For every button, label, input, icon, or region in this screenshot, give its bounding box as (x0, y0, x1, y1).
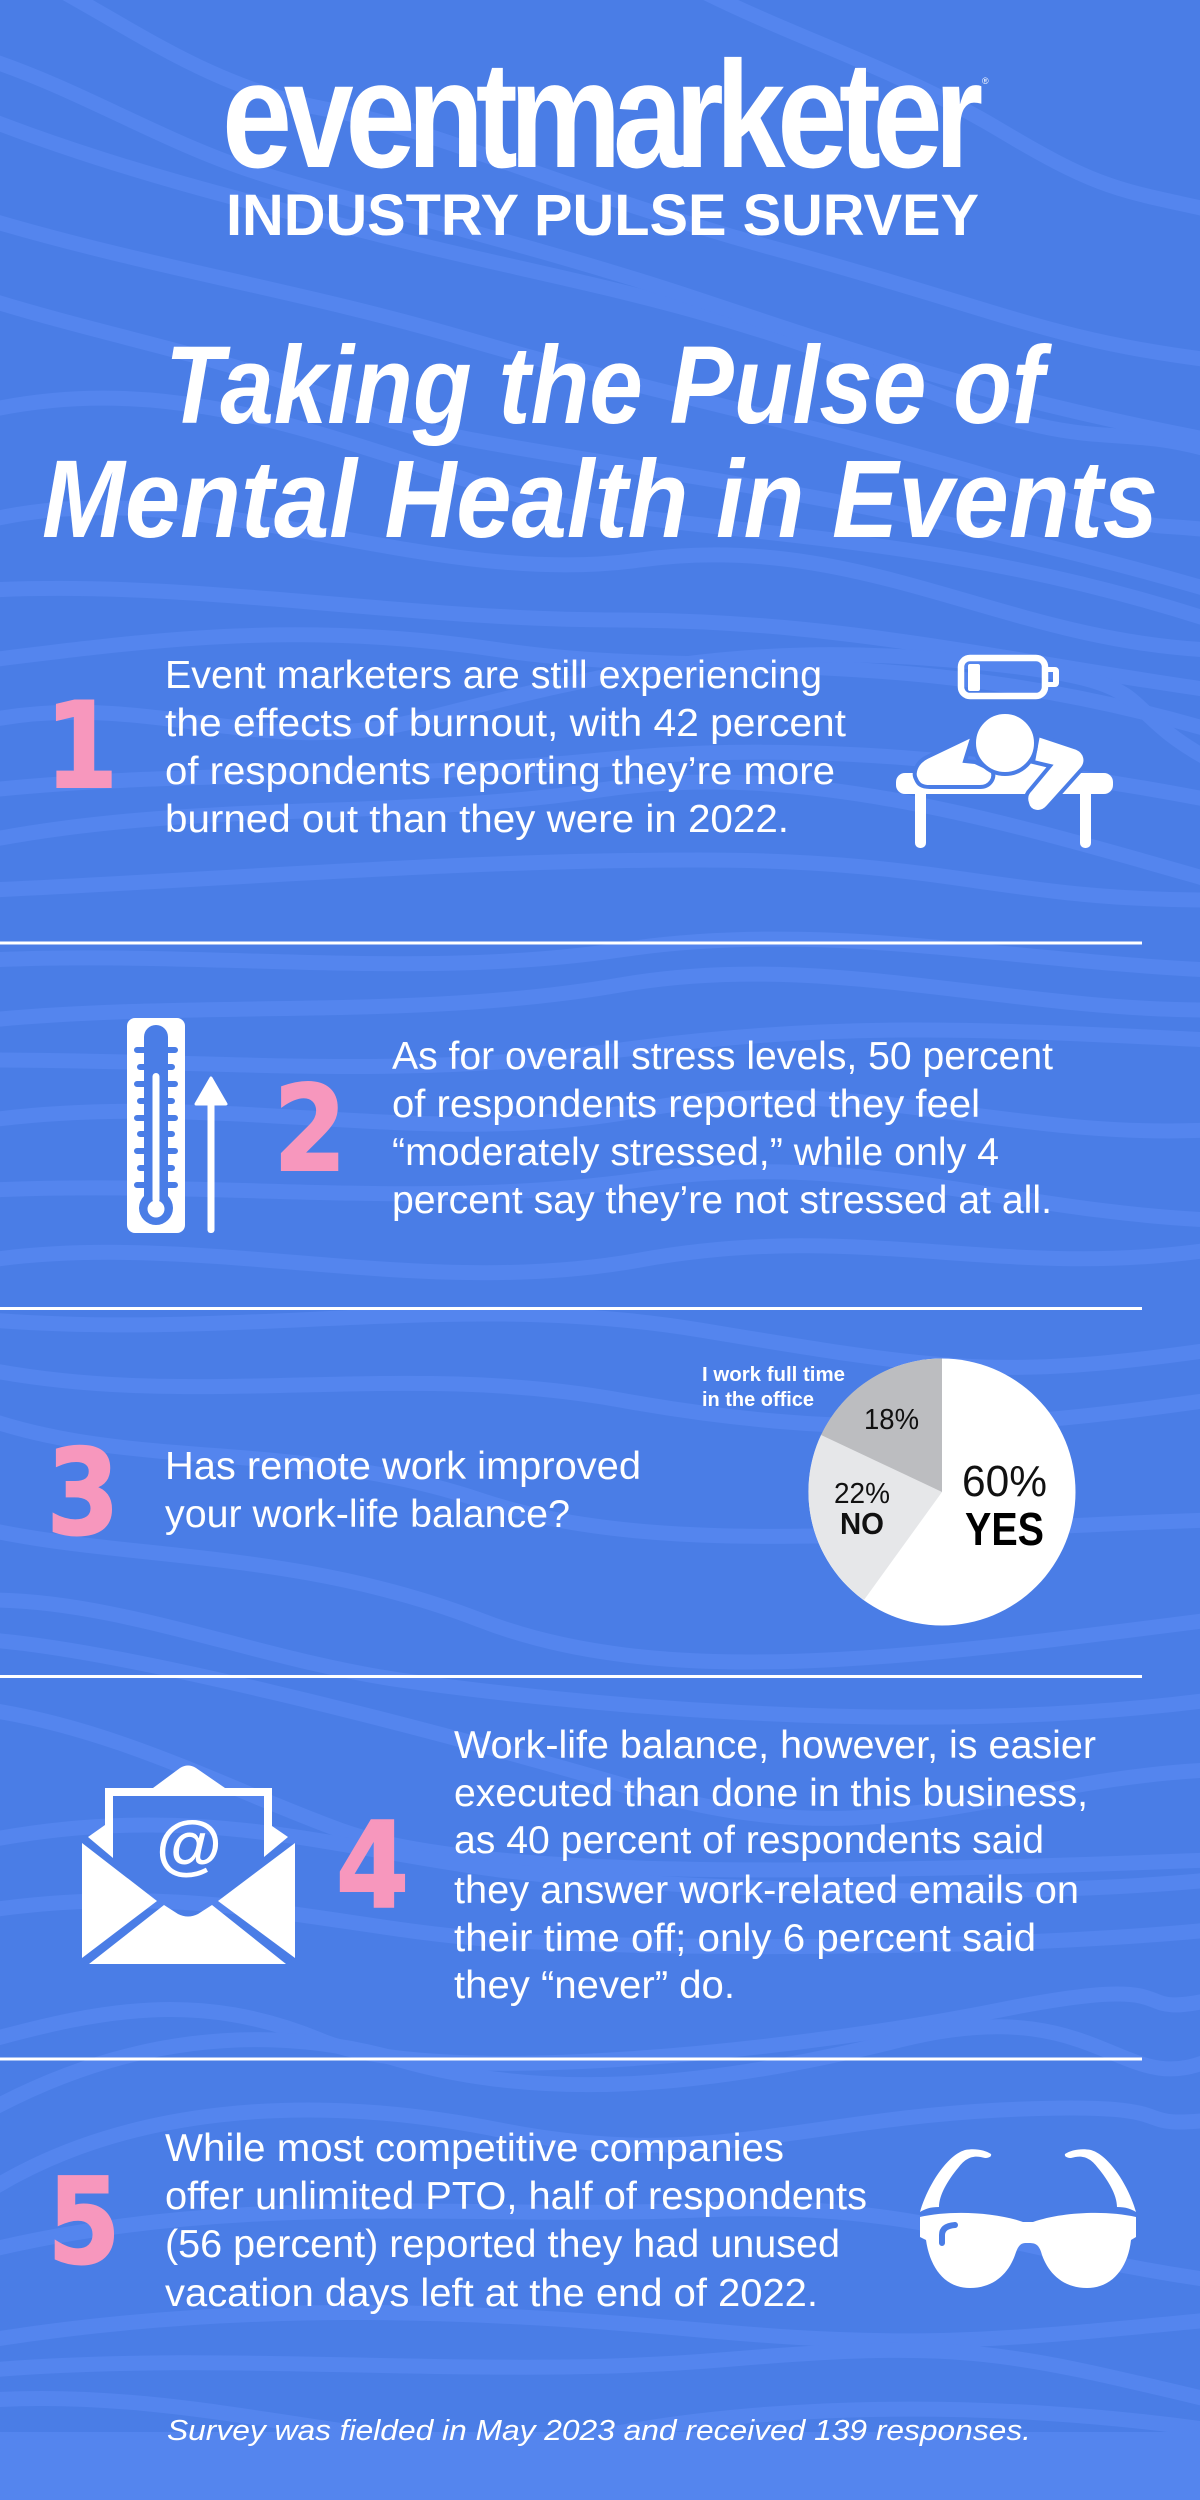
pie chart (702, 1358, 1076, 1626)
subtitle: industry pulse survey: INDUSTRY PULSE SURVEY (226, 183, 979, 248)
text: item 1 (165, 654, 846, 841)
icon: up arrow (196, 1078, 226, 1233)
number 2: 2 (274, 1061, 346, 1199)
panel: item 1 burnout (45, 654, 1113, 848)
pie chart: YES (965, 1503, 1044, 1555)
footer note: Survey was fielded in May 2023 and received 139 responses. (167, 2415, 1031, 2447)
panel: item 2 stress (127, 1018, 1053, 1233)
text: item 2: percent say they’re not stressed at all. (392, 1179, 1052, 1222)
text: item 1: Event marketers are still experiencing (165, 654, 822, 697)
text: item 5 (165, 2127, 867, 2315)
text: item 3: Has remote work improved (165, 1445, 641, 1488)
text: item 4: Work-life balance, however, is easier (454, 1724, 1096, 1767)
text: item 5: (56 percent) reported they had unused (165, 2223, 840, 2266)
text: item 5: vacation days left at the end of 2022. (165, 2272, 818, 2315)
number 4: 4 (336, 1798, 409, 1936)
number 3: 3 (46, 1425, 120, 1563)
text: item 4: as 40 percent of respondents said (454, 1819, 1044, 1862)
text: item 3 (165, 1445, 641, 1536)
text: item 4: executed than done in this business, (454, 1772, 1088, 1815)
panel: item 4 email (82, 1724, 1096, 2007)
panel: item 3 remote work (46, 1358, 1076, 1626)
text: item 1: the effects of burnout, with 42 percent (165, 702, 846, 745)
text: item 1: burned out than they were in 2022. (165, 798, 789, 841)
text: item 4: their time off; only 6 percent said (454, 1917, 1036, 1960)
title (42, 324, 1158, 561)
text: item 5: offer unlimited PTO, half of respondents (165, 2175, 867, 2218)
text: item 2: “moderately stressed,” while only 4 (392, 1131, 999, 1174)
pie chart: 22% (834, 1478, 890, 1510)
title: Taking the Pulse of (165, 324, 1052, 447)
text: item 2 (392, 1035, 1053, 1222)
divider 3 (0, 1675, 1142, 1678)
pie chart: 18% (864, 1404, 919, 1436)
icon: sunglasses (920, 2149, 1136, 2288)
text: item 4: they “never” do. (454, 1964, 735, 2007)
number 1: 1 (45, 678, 118, 816)
icon: exhausted person on desk (896, 712, 1113, 848)
logo: eventmarketer: eventmarketer (222, 30, 981, 200)
icon: low battery (961, 658, 1059, 696)
text: item 5: While most competitive companies (165, 2127, 784, 2170)
pie chart: 60% (962, 1457, 1047, 1506)
number 5: 5 (48, 2154, 120, 2292)
icon: open envelope (82, 1766, 295, 1964)
icon: thermometer (127, 1018, 185, 1233)
text: item 4 (454, 1724, 1096, 2007)
pie chart: I work full time (702, 1364, 845, 1386)
divider 1 (0, 942, 1142, 944)
text: item 4: they answer work-related emails on (454, 1869, 1079, 1912)
logo: eventmarketer: ® (982, 76, 989, 86)
panel: item 5 vacation (48, 2127, 1136, 2315)
icon: open envelope: @ (156, 1807, 222, 1881)
divider 4 (0, 2058, 1142, 2060)
text: item 2: As for overall stress levels, 50 percent (392, 1035, 1053, 1078)
text: item 3: your work-life balance? (165, 1493, 570, 1536)
text: item 2: of respondents reported they feel (392, 1083, 980, 1126)
pie chart: in the office (702, 1389, 814, 1411)
text: item 1: of respondents reporting they’re more (165, 750, 835, 793)
divider 2 (0, 1307, 1142, 1310)
pie chart: NO (840, 1506, 884, 1541)
